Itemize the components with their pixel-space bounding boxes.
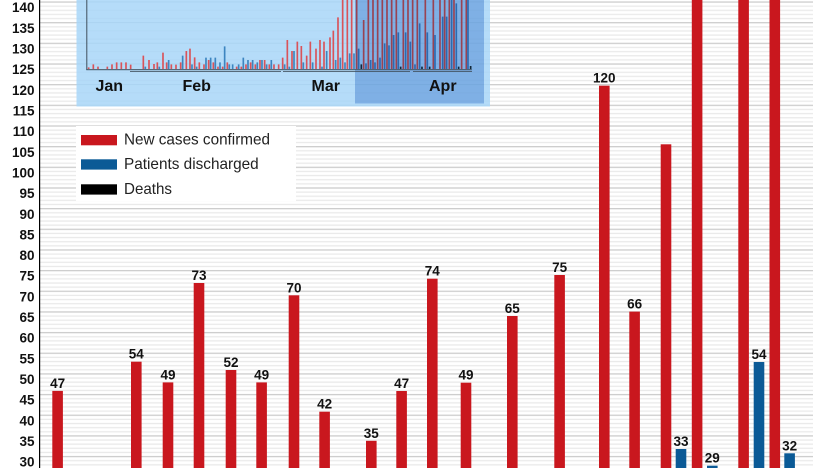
inset bars March to April [283, 0, 471, 69]
y axis labels: 115 [13, 104, 35, 118]
legend: deaths: Deaths [124, 181, 172, 198]
bar value labels: 33 [673, 434, 689, 449]
bar value labels: 54 [129, 347, 144, 362]
y axis labels: 55 [19, 351, 35, 366]
bar value labels: 120 [593, 71, 616, 86]
bar value labels: 35 [364, 426, 379, 441]
y axis labels: 35 [19, 434, 35, 449]
legend: new cases confirmed: New cases confirmed [124, 132, 270, 148]
y axis labels: 75 [19, 269, 35, 284]
legend: patients discharged: Patients discharged [124, 156, 259, 173]
y axis labels: 100 [12, 166, 34, 180]
y axis labels: 140 [12, 0, 34, 15]
y axis labels: 40 [19, 413, 34, 428]
legend: deaths [81, 181, 172, 198]
legend [76, 126, 296, 201]
bar value labels: 47 [394, 376, 409, 391]
y axis line [39, 0, 40, 468]
y axis labels: 80 [19, 248, 34, 263]
bar value labels: 29 [705, 451, 720, 466]
inset month labels: Feb [182, 78, 211, 95]
patients discharged bars [676, 362, 795, 468]
bar value labels: 47 [50, 376, 65, 391]
inset axes [86, 0, 472, 72]
y axis labels: 85 [19, 227, 35, 242]
y axis labels [12, 0, 35, 468]
bar value labels: 74 [425, 264, 440, 279]
April highlight band [355, 0, 484, 104]
bar value labels: 42 [317, 397, 332, 412]
bar value labels: 66 [627, 297, 643, 312]
legend background [76, 126, 296, 201]
y axis labels: 125 [12, 62, 35, 77]
bar value labels: 52 [223, 355, 239, 370]
y axis labels: 45 [19, 393, 35, 408]
inset background [76, 0, 490, 106]
bar value labels: 73 [191, 268, 207, 283]
y axis labels: 120 [12, 83, 34, 98]
inset chart: full-period daily figures [76, 0, 490, 106]
bar value labels: 49 [458, 368, 474, 383]
inset month labels: Apr [429, 78, 457, 95]
bar value labels: 32 [782, 438, 797, 453]
inset bars January to February [89, 46, 279, 69]
inset month labels [96, 78, 457, 95]
y axis labels: 50 [19, 372, 34, 387]
y axis labels: 130 [12, 42, 34, 56]
bar value labels: 49 [160, 367, 176, 382]
y axis labels: 90 [19, 207, 34, 222]
y axis labels: 65 [19, 310, 35, 325]
y axis labels: 95 [19, 186, 35, 201]
bar value labels: 75 [552, 260, 568, 275]
inset month labels: Mar [312, 78, 340, 95]
y axis labels: 105 [12, 145, 35, 160]
bar value labels: 49 [254, 367, 269, 382]
y axis labels: 60 [19, 331, 34, 346]
y axis labels: 135 [12, 21, 35, 36]
bar value labels: 65 [505, 301, 520, 316]
y axis labels: 70 [19, 289, 34, 304]
bar value labels [50, 71, 797, 466]
inset month labels: Jan [96, 78, 123, 95]
bar value labels: 70 [286, 280, 302, 295]
y axis labels: 110 [13, 124, 34, 139]
bar value labels: 54 [751, 347, 767, 362]
